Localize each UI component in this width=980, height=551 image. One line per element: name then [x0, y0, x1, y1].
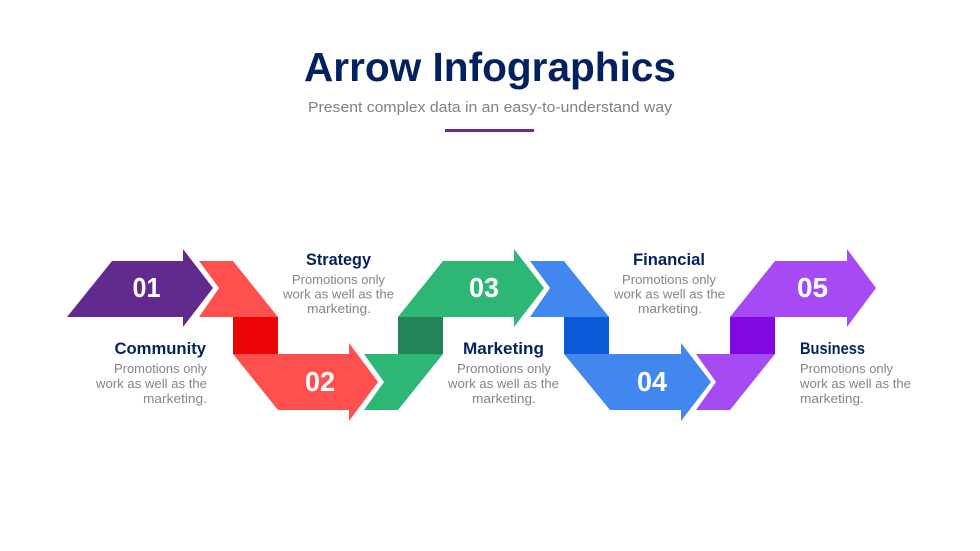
number 05: 05: [797, 272, 828, 303]
title underline: [445, 129, 534, 132]
text block: Marketing: marketing.: [472, 391, 536, 406]
text block: Community: Promotions only: [114, 361, 207, 376]
text block: Marketing: Marketing: [463, 339, 544, 358]
arrow step 04: [530, 261, 711, 421]
arrow step 05: [696, 249, 876, 410]
arrow step 03: [364, 249, 544, 410]
number 04: 04: [637, 366, 667, 397]
text block: Financial: marketing.: [638, 301, 702, 316]
arrow step 01: [67, 249, 213, 327]
text block: Financial: [613, 250, 725, 316]
text block: Business: marketing.: [800, 391, 864, 406]
number 02: 02: [305, 366, 335, 397]
number 01: 01: [132, 272, 160, 303]
text block: Business: [799, 339, 911, 406]
text block: Strategy: [282, 250, 394, 316]
text block: Financial: Financial: [633, 250, 705, 269]
text block: Financial: work as well as the: [613, 286, 725, 302]
text block: Strategy: work as well as the: [282, 286, 394, 302]
subtitle: Present complex data in an easy-to-understand way: [308, 99, 673, 116]
text block: Business: Promotions only: [800, 361, 893, 376]
text block: Marketing: work as well as the: [447, 376, 559, 391]
text block: Strategy: marketing.: [307, 301, 371, 316]
text block: Community: marketing.: [143, 391, 207, 406]
arrow step 02: [199, 261, 378, 421]
text block: Marketing: Promotions only: [457, 361, 551, 376]
number 03: 03: [469, 272, 499, 303]
text block: Community: [95, 339, 207, 406]
title: Arrow Infographics: [304, 44, 676, 90]
text block: Marketing: [447, 339, 559, 406]
text block: Financial: Promotions only: [622, 272, 716, 287]
text block: Business: work as well as the: [799, 376, 911, 391]
text block: Business: Business: [800, 339, 865, 358]
text block: Community: Community: [114, 339, 207, 358]
text block: Strategy: Strategy: [306, 250, 372, 269]
text block: Strategy: Promotions only: [292, 272, 385, 287]
text block: Community: work as well as the: [95, 376, 207, 391]
